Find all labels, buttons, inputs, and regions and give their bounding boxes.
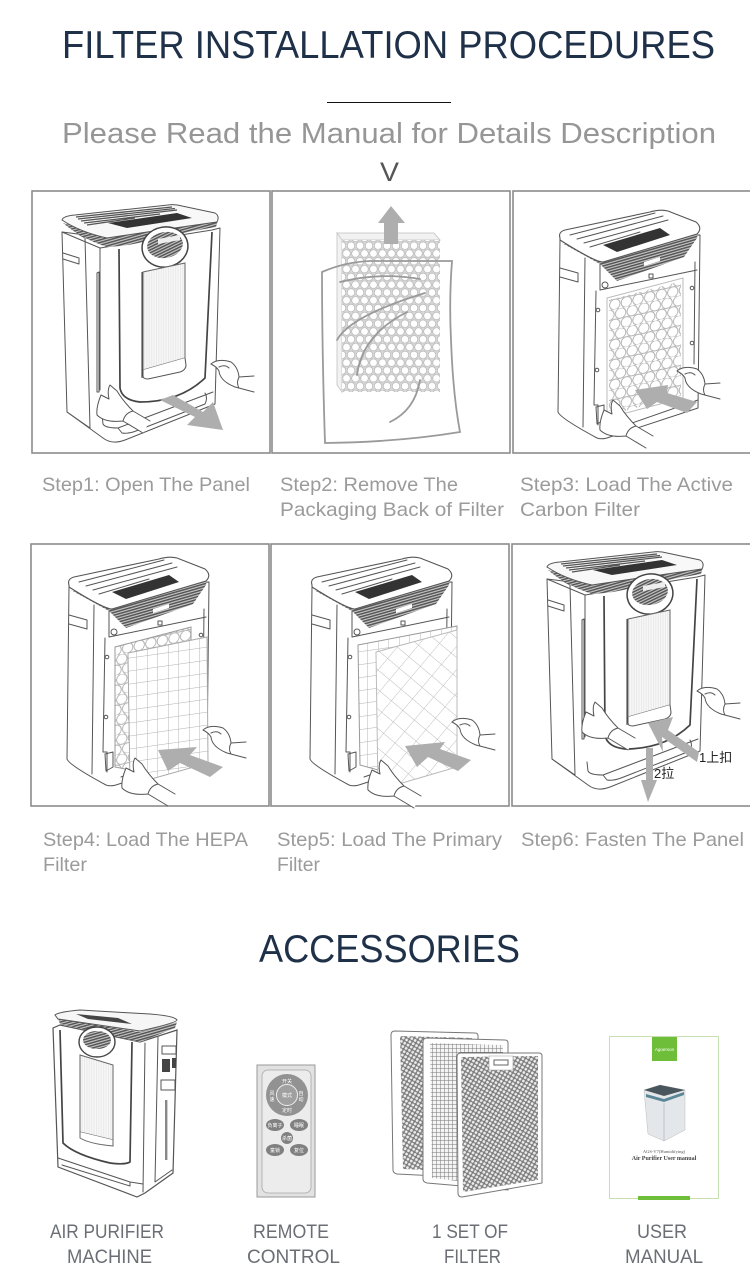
label: air purifier machine: [50, 1221, 164, 1268]
HEPA filter: [423, 1038, 508, 1190]
HEPA filter: [115, 627, 191, 770]
active carbon filter: [391, 1031, 478, 1178]
arrow: push filter in: [158, 747, 223, 777]
icon: user manual: AGS-V7(Humidifying): [643, 1149, 686, 1154]
caption: step 4: Step4: Load The HEPA: [43, 829, 248, 851]
label: filter set: FILTER: [444, 1246, 501, 1268]
caption: step 1: Step1: Open The Panel: [42, 474, 250, 496]
arrow: pull panel out: [160, 395, 223, 430]
label: filter set: [432, 1221, 508, 1268]
panel: step 4 load HEPA filter: [31, 544, 269, 806]
primary filter: [358, 626, 457, 770]
heading: accessories: ACCESSORIES: [259, 928, 520, 971]
label: air purifier machine: MACHINE: [67, 1246, 152, 1268]
icon: remote control: 风: [269, 1091, 275, 1097]
callout: 1 up: 1上扣: [699, 750, 732, 765]
icon: user manual: Agoerson: [655, 1047, 675, 1052]
icon: remote control: 睡眠: [294, 1122, 304, 1129]
icon: remote control: 定时: [282, 1107, 292, 1114]
panel: step 1 open the panel: [32, 191, 270, 453]
caption: step 3: [520, 474, 733, 521]
label: remote control: [247, 1221, 340, 1268]
caption: step 6: Step6: Fasten The Panel: [521, 829, 744, 851]
caption: step 2: Packaging Back of Filter: [280, 499, 505, 521]
callout: 2 pull: 2拉: [654, 766, 674, 781]
panel: step 5 load primary filter: [271, 544, 509, 808]
icon: air purifier machine: [53, 1010, 177, 1197]
arrow: lift out of bag: [378, 206, 405, 244]
icon: remote control: 动: [298, 1096, 304, 1103]
plastic bag outline: [322, 261, 460, 443]
panel: step 2 remove packaging: [272, 191, 510, 453]
title: FILTER INSTALLATION PROCEDURES: [62, 24, 715, 67]
title underline: [327, 102, 451, 103]
arrow: pull down: [641, 748, 657, 802]
caption: step 4: [43, 829, 248, 876]
label: air purifier machine: AIR PURIFIER: [50, 1221, 164, 1243]
icon: remote control: 模式: [282, 1092, 292, 1099]
caption: step 4: Filter: [43, 854, 88, 876]
arrow: push filter in: [405, 742, 471, 771]
icon: remote control: 负离子: [267, 1122, 283, 1129]
icon: user manual: Air Purifier User manual: [632, 1156, 697, 1162]
caption: step 5: Step5: Load The Primary: [277, 829, 502, 851]
label: user manual: MANUAL: [625, 1246, 703, 1268]
icon: remote control: [257, 1065, 315, 1197]
icon: remote control: 复位: [294, 1147, 304, 1154]
icon: remote control: 童锁: [270, 1147, 280, 1154]
icon: remote control: 自: [298, 1090, 304, 1097]
caption: step 5: Filter: [277, 854, 320, 876]
caption: step 3: Step3: Load The Active: [520, 474, 733, 496]
panel: step 3 load active carbon filter: [513, 191, 750, 453]
label: remote control: CONTROL: [247, 1246, 340, 1268]
label: filter set: 1 SET OF: [432, 1221, 508, 1243]
subtitle: Please Read the Manual for Details Description: [62, 118, 716, 150]
active carbon filter: [607, 278, 683, 418]
icon: remote control: 杀菌: [282, 1135, 292, 1142]
caption: step 5: [277, 829, 502, 876]
chevron V: V: [380, 157, 399, 187]
primary filter: [457, 1053, 542, 1197]
label: user manual: USER: [637, 1221, 687, 1243]
icon: filter set: [391, 1031, 542, 1197]
label: remote control: REMOTE: [253, 1221, 329, 1243]
icon: user manual: [610, 1036, 718, 1200]
icon: remote control: 开关: [282, 1078, 292, 1085]
panel: step 6 fasten the panel: [512, 544, 750, 806]
arrow: push up: [648, 717, 699, 762]
label: user manual: [625, 1221, 703, 1268]
caption: step 2: [280, 474, 505, 521]
icon: remote control: 速: [269, 1097, 275, 1103]
arrow: push filter in: [635, 385, 697, 413]
caption: step 2: Step2: Remove The: [280, 474, 458, 496]
caption: step 3: Carbon Filter: [520, 499, 641, 521]
